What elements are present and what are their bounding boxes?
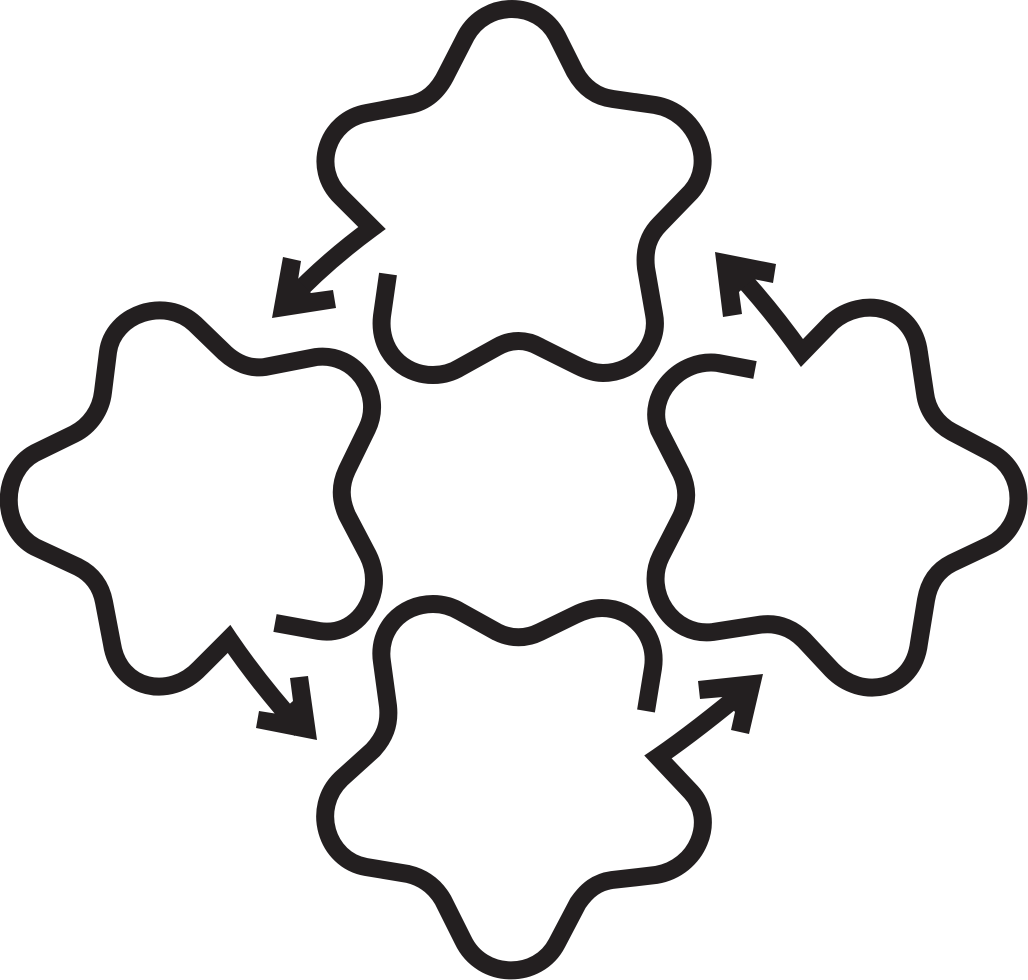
panel: left star shape with arrow <box>9 310 374 740</box>
panel: top star shape with arrow <box>272 9 703 375</box>
arrow head: top to left <box>272 257 336 318</box>
arrow head: right to top <box>715 252 776 317</box>
panel: bottom star shape with arrow <box>325 604 763 970</box>
arrow head: bottom to right <box>698 674 763 734</box>
panel: right star shape with arrow <box>656 252 1018 688</box>
arrow head: left to bottom <box>256 676 317 740</box>
